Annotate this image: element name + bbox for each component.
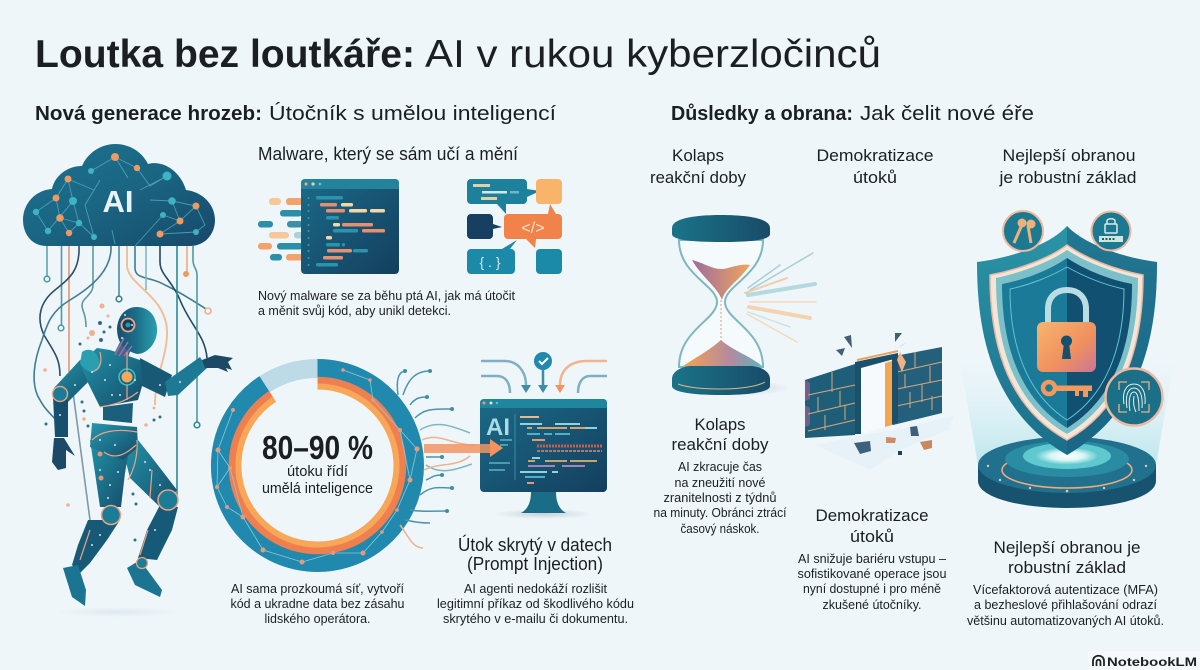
heading: column titles: je robustní základ — [998, 169, 1136, 187]
icon: monitor with AI: AI — [486, 414, 510, 441]
heading: right section — [671, 103, 1034, 125]
heading: prompt injection: (Prompt Injection) — [467, 554, 603, 574]
heading: left section: Útočník s umělou inteligencí — [269, 102, 556, 125]
text: democratisation: AI snižuje bariéru vstupu – — [798, 552, 946, 566]
puppet strings — [34, 225, 211, 520]
text: prompt injection description — [437, 581, 634, 626]
title: AI v rukou kyberzločinců — [425, 33, 881, 76]
text: reaction time: na zneužití nové — [674, 476, 766, 490]
text: democratisation: sofistikované operace jsou — [798, 567, 947, 581]
title: Loutka bez loutkáře: — [35, 33, 415, 76]
heading: column titles: Demokratizace — [816, 147, 934, 165]
icon: chat blocks with code: </> — [521, 220, 545, 237]
icon: shield — [977, 226, 1157, 455]
icon: code window — [258, 179, 399, 274]
panel: self-learning malware — [258, 144, 562, 318]
icon: hourglass — [672, 215, 790, 396]
icon: padlock — [1037, 290, 1096, 372]
stat: 80-90 percent: 80–90 % — [262, 429, 373, 466]
connector lines — [397, 369, 475, 548]
text: reaction time: AI zkracuje čas — [678, 460, 762, 474]
text: robust defence: většinu automatizovaných AI útoků. — [967, 614, 1164, 628]
text: prompt injection description: AI agenti nedokáží rozlišit — [464, 581, 607, 596]
heading: left section: Nová generace hrozeb: — [35, 103, 262, 125]
text: reaction time: zranitelnosti z týdnů — [664, 491, 777, 505]
robot left leg — [63, 440, 128, 606]
heading: right section: Jak čelit nové éře — [860, 103, 1034, 125]
icon: AI cloud — [23, 144, 215, 246]
text: donut description — [230, 581, 404, 626]
icon: chat blocks with code — [467, 179, 562, 274]
text: robust defence: Nejlepší obranou je — [994, 538, 1140, 557]
text: malware description: Nový malware se za běhu ptá AI, jak má útočit — [258, 288, 515, 303]
robot particles — [59, 314, 181, 546]
heading: left section — [35, 102, 556, 125]
text: robust defence — [967, 538, 1164, 628]
robot right leg — [125, 440, 178, 597]
text: prompt injection description: skrytého v e-mailu či dokumentu. — [443, 611, 628, 626]
text: reaction time: reakční doby — [672, 435, 769, 454]
heading: prompt injection: Útok skrytý v datech — [458, 534, 612, 555]
icon: keys badge — [1003, 211, 1043, 251]
arrow: injection into monitor — [424, 439, 503, 457]
robot torso — [80, 348, 143, 460]
heading: prompt injection — [458, 534, 612, 574]
stat: 80-90 percent: útoku řídí — [287, 463, 349, 480]
stat: 80-90 percent: umělá inteligence — [262, 480, 373, 497]
text: democratisation: zkušené útočníky. — [822, 598, 922, 612]
icon: monitor with AI — [480, 399, 607, 519]
text: reaction time: Kolaps — [694, 415, 746, 434]
icon: fingerprint badge — [1106, 368, 1162, 426]
text: robust defence: a bezheslové přihlašování odrazí — [974, 598, 1158, 612]
heading: column titles: reakční doby — [650, 169, 747, 187]
icon: robot puppet — [43, 304, 233, 617]
text: democratisation: útoků — [850, 527, 894, 546]
robot left arm — [52, 360, 98, 470]
panel: democratisation of attacks — [798, 333, 955, 612]
footer: NotebookLM logo: NotebookLM — [1107, 655, 1197, 669]
robot head — [114, 307, 157, 358]
icon: glowing platform — [958, 350, 1176, 508]
footer: NotebookLM logo — [1088, 651, 1200, 670]
text: malware description — [258, 288, 515, 318]
text: democratisation — [798, 506, 947, 612]
text: democratisation: Demokratizace — [816, 506, 928, 525]
icon: broken brick wall — [805, 333, 955, 470]
text: donut description: AI sama prozkoumá síť, vytvoří — [231, 581, 404, 596]
icon: speed rays — [745, 253, 816, 342]
chart: donut 80-90 percent — [215, 368, 420, 564]
stat: 80-90 percent — [262, 429, 373, 497]
text: robust defence: Vícefaktorová autentizace (MFA) — [973, 583, 1158, 597]
title — [35, 33, 881, 76]
text: robust defence: robustní základ — [1008, 558, 1126, 577]
text: malware description: a měnit svůj kód, aby unikl detekci. — [258, 303, 451, 318]
heading: malware: Malware, který se sám učí a mění — [258, 144, 518, 164]
icon: check and incoming arrows — [481, 352, 607, 393]
panel: prompt injection — [397, 352, 634, 626]
heading: column titles: útoků — [853, 169, 897, 187]
panel: 80-90 percent donut — [215, 368, 420, 626]
illustration: AI cloud and puppet robot — [23, 144, 233, 617]
text: reaction time: časový náskok. — [680, 522, 760, 536]
heading: column titles: Nejlepší obranou — [1002, 147, 1136, 165]
text: reaction time — [654, 415, 787, 536]
heading: column titles — [650, 147, 1136, 187]
icon: password badge — [1092, 212, 1130, 250]
robot joints and core — [52, 352, 178, 568]
text: democratisation: nyní dostupné i pro méně — [803, 582, 941, 596]
robot ground shadow — [56, 607, 180, 617]
panel: reaction time collapse — [654, 215, 816, 536]
text: donut description: lidského operátora. — [264, 611, 370, 626]
panel: robust defence — [958, 211, 1176, 628]
heading: right section: Důsledky a obrana: — [671, 103, 853, 125]
icon: key — [1043, 382, 1092, 397]
heading: column titles: Kolaps — [672, 147, 724, 165]
icon: chat blocks with code: { . } — [479, 254, 501, 270]
text: donut description: kód a ukradne data bez zásahu — [230, 596, 404, 611]
icon: AI cloud: AI — [102, 184, 134, 219]
text: reaction time: na minuty. Obránci ztrácí — [654, 506, 787, 520]
text: prompt injection description: legitimní příkaz od škodlivého kódu — [437, 596, 634, 611]
robot right arm — [140, 355, 233, 397]
